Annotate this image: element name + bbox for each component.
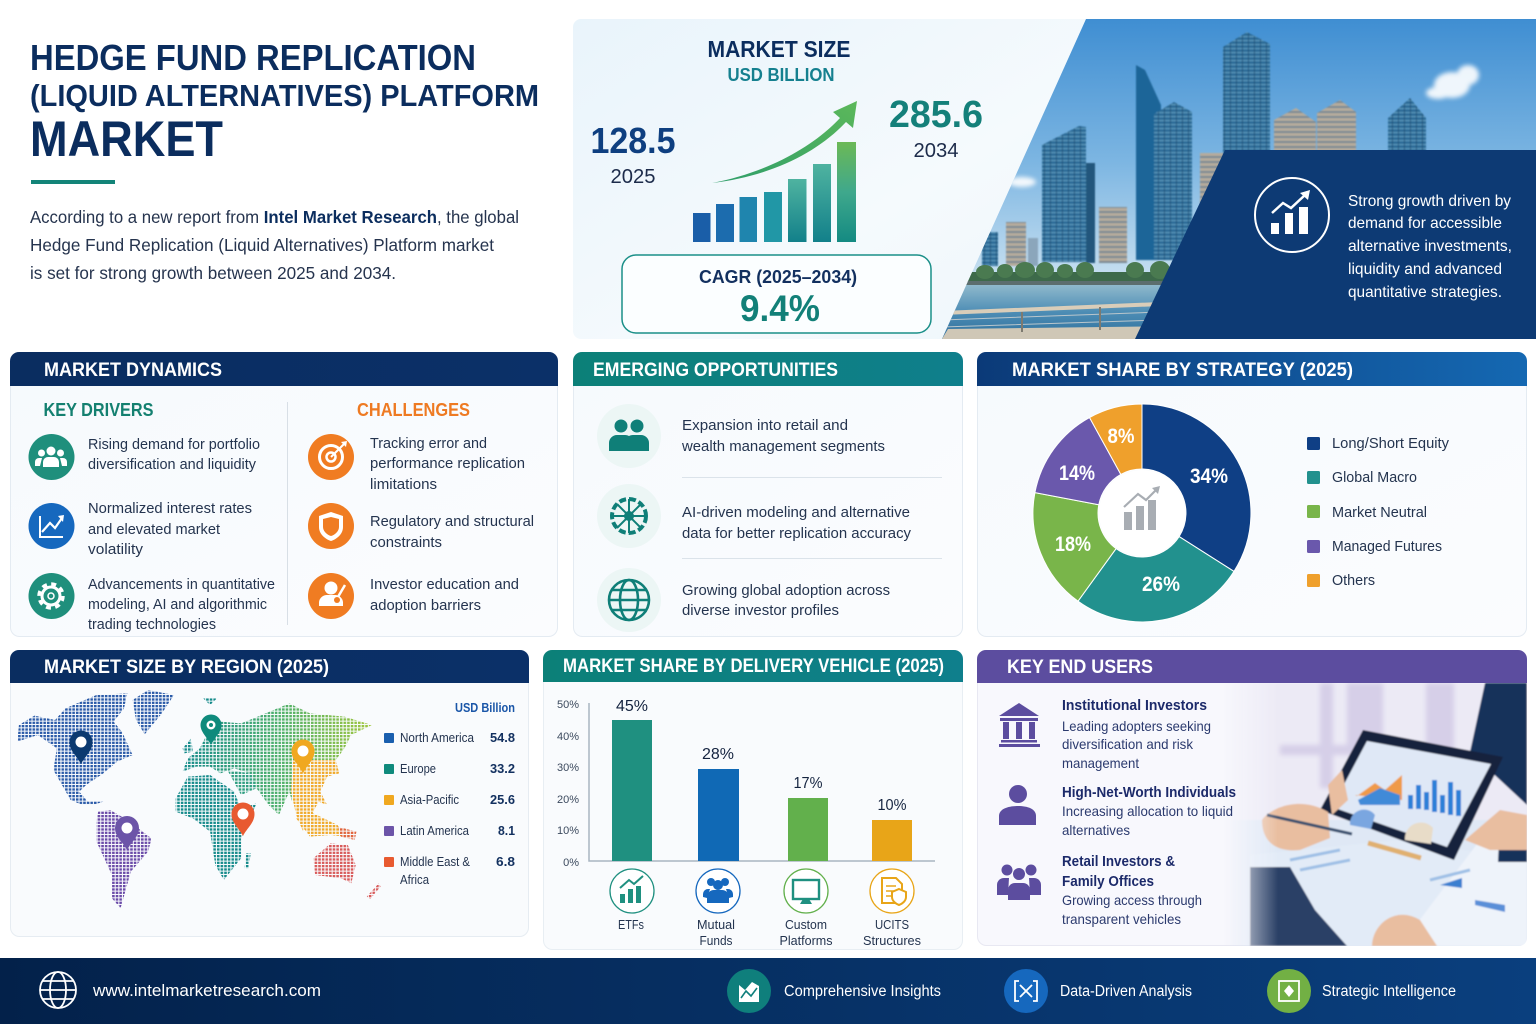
world dot map (17, 690, 381, 908)
axes: 0% (563, 857, 579, 869)
opportunity text 2: AI-driven modeling and alternative (682, 504, 910, 521)
intro paragraph (30, 207, 519, 283)
key drivers heading: KEY DRIVERS (44, 400, 154, 420)
pin: Asia-Pacific (292, 740, 314, 773)
intro paragraph: Hedge Fund Replication (Liquid Alternatives) Platform market (30, 235, 494, 255)
opportunity text 3: Growing global adoption across (682, 582, 890, 599)
opportunity text 3: diverse investor profiles (682, 602, 839, 619)
end user text 3 (1062, 854, 1202, 927)
website: www.intelmarketresearch.com (92, 981, 321, 1000)
growth callout (1255, 178, 1512, 301)
icon: Custom Platforms (784, 869, 828, 913)
header (573, 352, 963, 386)
region legend: Africa (400, 873, 429, 887)
icon: investor (308, 573, 354, 619)
callout text: demand for accessible (1348, 215, 1502, 232)
panel: market share by strategy (977, 352, 1527, 636)
header: EMERGING OPPORTUNITIES (593, 360, 838, 381)
legend: Managed Futures (1332, 538, 1442, 555)
legend: Long/Short Equity (1332, 435, 1449, 452)
header (977, 650, 1527, 683)
title block (30, 37, 539, 283)
panel: emerging opportunities (573, 352, 963, 636)
bar category labels: Custom (785, 918, 827, 932)
challenge text 1 (370, 435, 525, 493)
region legend: Europe (400, 762, 436, 776)
title: (LIQUID ALTERNATIVES) PLATFORM (30, 78, 539, 113)
bar chart (557, 698, 935, 869)
driver text 1 (88, 436, 260, 473)
axes: 30% (557, 762, 579, 774)
end user text 3: transparent vehicles (1062, 911, 1181, 927)
pie chart (1033, 404, 1251, 622)
pin: Latin America (115, 816, 139, 850)
icon: person (999, 785, 1036, 825)
header (10, 650, 529, 683)
icon: target (308, 434, 354, 480)
bar values (616, 698, 906, 814)
callout text: liquidity and advanced (1348, 261, 1502, 278)
panel: city skyline photo (940, 19, 1536, 339)
challenge text 2 (370, 513, 534, 551)
driver text 2: and elevated market (88, 521, 221, 538)
icon: AI chip brain (597, 484, 661, 548)
intro paragraph: According to a new report from Intel Market Research, the global (30, 207, 519, 227)
map pins (70, 714, 314, 850)
waterfront deck (942, 326, 1141, 339)
end user text 1 (1062, 698, 1211, 771)
bar values: 45% (616, 698, 648, 715)
end user text 3: Family Offices (1062, 874, 1154, 890)
growth bar chart (693, 142, 856, 242)
pie labels: 34% (1190, 465, 1228, 488)
icon: globe (597, 568, 661, 632)
tablet (1320, 730, 1503, 860)
callout text: alternative investments, (1348, 238, 1512, 255)
region legend: Asia-Pacific (400, 793, 459, 807)
icon: globe (40, 972, 76, 1008)
region legend: 8.1 (498, 823, 515, 838)
challenge text 3 (370, 576, 519, 614)
region legend: 6.8 (496, 854, 515, 869)
market size heading: USD BILLION (728, 65, 834, 85)
opportunity text 3 (682, 582, 890, 619)
region legend: 33.2 (490, 761, 515, 776)
end user text 1: Leading adopters seeking (1062, 718, 1211, 734)
axes (557, 699, 935, 869)
opportunity text 1: wealth management segments (681, 438, 885, 455)
callout text: Strong growth driven by (1348, 193, 1511, 210)
region legend: Latin America (400, 824, 469, 838)
legend (1307, 435, 1449, 589)
bar category labels: Platforms (780, 934, 832, 948)
axes: 20% (557, 794, 579, 806)
challenge text 1: Tracking error and (370, 435, 487, 452)
CAGR callout: CAGR (2025–2034) (699, 267, 857, 287)
challenge text 1: performance replication (370, 455, 525, 472)
driver text 2: volatility (88, 541, 144, 558)
driver text 3: modeling, AI and algorithmic (88, 596, 267, 613)
value 2034 (889, 94, 983, 162)
pie labels: 8% (1108, 425, 1135, 448)
value 2025 (590, 120, 676, 188)
icon: gear (28, 573, 74, 619)
value 2025: 2025 (610, 166, 656, 188)
navy overlay (1135, 150, 1536, 339)
bar category labels: UCITS (875, 918, 909, 932)
pin: Middle East & Africa (232, 802, 254, 836)
value 2034: 2034 (914, 140, 958, 162)
icon: bank (999, 703, 1040, 747)
bar values: 10% (878, 797, 906, 814)
badge: data-driven analysis (1004, 969, 1192, 1013)
title: MARKET (30, 111, 223, 167)
driver text 1: diversification and liquidity (88, 456, 256, 473)
panel: market size by region (10, 650, 529, 936)
bar category labels: Mutual (697, 918, 735, 932)
icon: people (28, 434, 74, 480)
panel: market share by delivery vehicle (543, 650, 963, 950)
end user text 1: Institutional Investors (1062, 698, 1207, 714)
end user text 3: Retail Investors & (1062, 854, 1175, 870)
region legend: Middle East & (400, 855, 471, 869)
driver text 3: Advancements in quantitative (88, 576, 275, 593)
region legend: North America (400, 731, 474, 745)
CAGR callout (622, 255, 931, 333)
icon: Mutual Funds (696, 869, 740, 913)
pie labels: 26% (1142, 573, 1180, 596)
badge: strategic intelligence (1267, 969, 1456, 1013)
header: MARKET DYNAMICS (44, 360, 222, 381)
challenge text 2: Regulatory and structural (370, 513, 534, 530)
bar values: 17% (794, 775, 822, 792)
end user text 2: Increasing allocation to liquid (1062, 803, 1233, 819)
header: MARKET SHARE BY DELIVERY VEHICLE (2025) (563, 656, 944, 677)
header (10, 352, 558, 386)
region legend: 25.6 (490, 792, 515, 807)
challenge text 2: constraints (370, 534, 442, 551)
legend: Market Neutral (1332, 504, 1427, 521)
icon: group (597, 404, 661, 468)
bar category labels: ETFs (618, 918, 644, 932)
market size heading (708, 36, 850, 85)
panel: key end users (977, 650, 1530, 950)
driver text 2: Normalized interest rates (88, 500, 252, 517)
end user text 1: diversification and risk (1062, 736, 1194, 752)
shoreline trees (966, 261, 1170, 285)
icon: center chart (1124, 486, 1160, 530)
challenge text 3: adoption barriers (370, 597, 481, 614)
pie labels (1055, 425, 1228, 596)
pin: Europe (200, 714, 222, 745)
driver text 3 (88, 576, 275, 633)
bar category labels: Funds (700, 934, 732, 948)
end user text 1: management (1062, 755, 1139, 771)
header: KEY END USERS (1007, 657, 1153, 678)
callout text (1348, 193, 1512, 301)
buildings (982, 32, 1426, 266)
badge: strategic intelligence: Strategic Intelligence (1322, 983, 1456, 1000)
challenge text 1: limitations (370, 476, 437, 493)
end user text 2: High-Net-Worth Individuals (1062, 785, 1236, 801)
legend: Others (1332, 572, 1375, 589)
footer (0, 958, 1536, 1024)
icon: growth chart (1255, 178, 1329, 252)
icon: shield (308, 503, 354, 549)
badge: comprehensive insights: Comprehensive Insights (784, 983, 941, 1000)
icon: ETFs (610, 869, 654, 913)
header: MARKET SIZE BY REGION (2025) (44, 657, 329, 678)
callout text: quantitative strategies. (1348, 284, 1502, 301)
icon: group (997, 864, 1041, 900)
photo: hands holding tablet (1240, 683, 1527, 946)
driver text 2 (88, 500, 252, 558)
driver text 1: Rising demand for portfolio (88, 436, 260, 453)
value 2034: 285.6 (889, 94, 983, 136)
badge: comprehensive insights (727, 969, 941, 1013)
header (543, 650, 963, 682)
region legend (384, 700, 515, 887)
end user text 2: alternatives (1062, 822, 1130, 838)
driver text 3: trading technologies (88, 616, 216, 633)
header: MARKET SHARE BY STRATEGY (2025) (1012, 360, 1353, 381)
water (942, 285, 1161, 339)
opportunity text 1 (681, 417, 885, 455)
legend: Global Macro (1332, 469, 1417, 486)
badge: data-driven analysis: Data-Driven Analysis (1060, 983, 1192, 1000)
title accent rule (31, 180, 115, 184)
opportunity text 1: Expansion into retail and (682, 417, 848, 434)
region legend: USD Billion (455, 700, 515, 715)
panel: market size (573, 19, 1086, 339)
bar category labels (618, 918, 921, 948)
panel: market dynamics (10, 352, 558, 636)
bars (612, 720, 912, 861)
market size heading: MARKET SIZE (708, 36, 850, 62)
challenges heading: CHALLENGES (357, 400, 470, 420)
hands (1262, 770, 1527, 946)
end user text 2 (1062, 785, 1236, 838)
region legend: 54.8 (490, 730, 515, 745)
opportunity text 2: data for better replication accuracy (682, 525, 911, 542)
axes: 50% (557, 699, 579, 711)
railing (942, 304, 1160, 332)
axes: 40% (557, 731, 579, 743)
challenge text 3: Investor education and (370, 576, 519, 593)
bar values: 28% (702, 746, 734, 763)
title (30, 37, 539, 167)
icon: UCITS Structures (870, 869, 914, 913)
pie labels: 14% (1059, 462, 1095, 485)
icon: rising chart (28, 503, 74, 549)
bar category labels: Structures (863, 934, 921, 948)
end user text 3: Growing access through (1062, 892, 1202, 908)
opportunity text 2 (682, 504, 911, 542)
pin: North America (70, 730, 92, 764)
header (977, 352, 1527, 386)
title: HEDGE FUND REPLICATION (30, 37, 476, 78)
clouds (1008, 65, 1479, 187)
axes: 10% (557, 825, 579, 837)
CAGR callout: 9.4% (740, 288, 820, 329)
value 2025: 128.5 (590, 120, 676, 161)
intro paragraph: is set for strong growth between 2025 and 2034. (30, 263, 396, 283)
growth arrow (712, 101, 857, 183)
pie labels: 18% (1055, 533, 1091, 556)
